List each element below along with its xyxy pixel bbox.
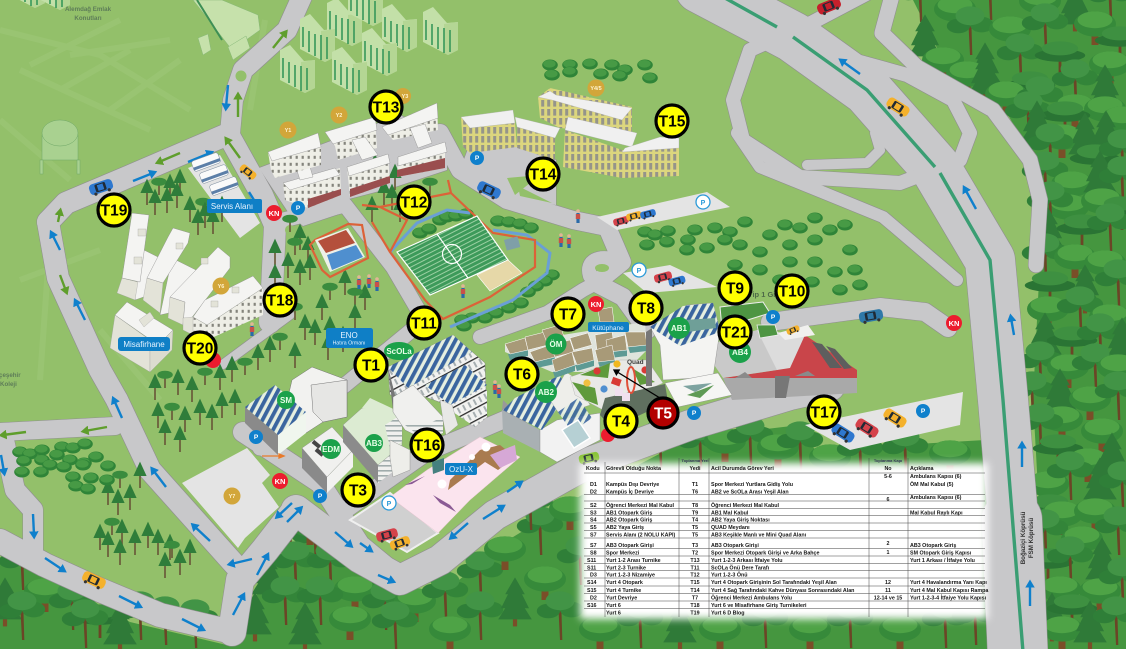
building circle: AB1: AB1 xyxy=(671,324,688,333)
building circle: SM xyxy=(277,391,295,409)
marker T11: T11 xyxy=(411,316,437,332)
faint paths in grass xyxy=(0,20,265,400)
marker T13 xyxy=(370,91,402,123)
dormitory Y4/5 yellow block xyxy=(461,88,679,178)
KN badges: KN xyxy=(275,477,285,486)
ScOLa building xyxy=(388,335,487,440)
assignment table: Yurt 6 D Blog xyxy=(711,610,745,616)
assignment table: ÖM Mal Kabul (5) xyxy=(910,481,954,488)
AB3 building xyxy=(343,398,410,483)
building circle: AB3 xyxy=(365,434,383,452)
building circles: student centre xyxy=(546,334,566,354)
assignment table: S8 xyxy=(590,550,597,556)
dormitory badges: Y4/5 xyxy=(590,86,602,92)
assignment table: Yurt 1-2-3 Nizamiye xyxy=(606,572,655,578)
assignment table: Spor Merkezi Otopark Girişi ve Arka Bahçe xyxy=(711,550,820,556)
assignment table: Yurt Devriye xyxy=(606,596,637,602)
assignment table: Kampüs Dışı Devriye xyxy=(606,482,659,488)
assignment table: T13 xyxy=(690,558,700,564)
marker T5 highlighted: T5 xyxy=(654,406,672,422)
marker T6: T6 xyxy=(513,366,531,384)
bushes: north and east clusters xyxy=(542,58,868,296)
AB2 building xyxy=(502,372,600,462)
marker T9: T9 xyxy=(726,280,744,298)
marker T12 xyxy=(398,186,430,218)
assignment table: Yurt 1-2-3 Önü xyxy=(711,572,748,578)
guest house building xyxy=(110,302,173,372)
assignment table: S4 xyxy=(590,518,597,524)
label: ENO Hatıra Ormanı: ENO xyxy=(340,331,358,340)
assignment table: Öğrenci Merkezi Mal Kabul xyxy=(606,502,675,509)
label: OzU-X: OzU-X xyxy=(449,465,474,474)
marker T18: T18 xyxy=(267,292,294,310)
dormitory badges xyxy=(212,80,604,504)
outlined parking badges: P xyxy=(637,268,642,275)
marker T15: T15 xyxy=(659,114,686,130)
building circle: EDM: EDM xyxy=(322,445,340,454)
cars xyxy=(80,0,911,591)
marker T4 xyxy=(605,405,637,437)
outlined parking badges: P xyxy=(701,200,706,207)
green roof terraces xyxy=(720,302,815,340)
assignment table: Öğrenci Merkezi Ambulans Yolu xyxy=(711,594,792,602)
assignment table: T5 xyxy=(692,525,698,531)
assignment table: Yurt 6 ve Misafirhane Giriş Turnikeleri xyxy=(711,603,807,609)
marker T4: T4 xyxy=(612,414,630,430)
assignment table: AB2 ve ScOLa Arası Yeşil Alan xyxy=(711,490,789,496)
assignment table: SM Otopark Giriş Kapısı xyxy=(910,550,972,556)
marker T11 xyxy=(408,307,440,339)
grass islands and loop detail xyxy=(236,70,609,272)
marker T1 xyxy=(355,349,387,381)
assignment table: T7 xyxy=(692,596,698,602)
building circle: AB3: AB3 xyxy=(366,439,383,448)
dormitory badges: Y3 xyxy=(402,94,408,100)
stream xyxy=(390,210,550,327)
light green housing blocks xyxy=(10,0,458,95)
assignment table: S11 xyxy=(587,558,596,564)
assignment table: Öğrenci Merkezi Mal Kabul xyxy=(711,502,780,509)
assignment table: ScOLa Önü Dere Tarafı xyxy=(711,564,770,572)
football field and beige pitch xyxy=(397,216,522,295)
arrow from T5 to quad xyxy=(614,370,660,398)
assignment table: S16 xyxy=(587,603,597,609)
assignment table: T14 xyxy=(690,588,700,594)
forest: bottom left xyxy=(0,560,235,649)
assignment table: No xyxy=(884,466,892,472)
marker T21 xyxy=(719,316,751,348)
marker T8 xyxy=(630,292,662,324)
marker T3: T3 xyxy=(349,482,367,500)
assignment table: AB2 Otopark Giriş xyxy=(606,518,652,524)
assignment table: Kodu xyxy=(586,466,600,472)
assignment table: T2 xyxy=(692,550,698,556)
marker T21: T21 xyxy=(722,324,749,342)
building circle: AB2 xyxy=(535,381,557,403)
assignment table: AB1 Otopark Giriş xyxy=(606,510,652,516)
assignment table: S3 xyxy=(590,510,597,516)
service buses xyxy=(191,152,239,196)
parking badges xyxy=(249,151,930,503)
dormitory badges: Y2 xyxy=(336,113,342,119)
forest trees: bottom xyxy=(0,416,998,649)
tennis and basketball court xyxy=(315,228,365,272)
assignment table: AB2 Yaya Giriş xyxy=(606,525,644,531)
sports centre building xyxy=(245,367,347,455)
label: Servis Alanı: Servis Alanı xyxy=(211,202,253,211)
assignment table: 12 xyxy=(885,580,891,586)
bridge labels: FSM Köprüsü xyxy=(1028,518,1035,558)
building circle: AB4 xyxy=(729,341,751,363)
marker T13: T13 xyxy=(373,100,400,116)
Çeşehir Koleji label: Koleji xyxy=(0,381,17,388)
assignment table: 2 xyxy=(887,541,890,547)
label: Misafirhane xyxy=(118,337,170,351)
Alemdağ Emlak Konutları label: Alemdağ Emlak xyxy=(65,6,111,13)
marker T16: T16 xyxy=(414,438,441,454)
bridge labels xyxy=(1020,511,1035,564)
marker T17: T17 xyxy=(811,404,837,422)
building circle: ScOLa xyxy=(384,342,414,360)
assignment table: Acil Durumda Görev Yeri xyxy=(711,466,774,472)
outlined parking badges xyxy=(382,195,710,510)
dormitory Y6 blocks xyxy=(117,213,263,340)
assignment table: T18 xyxy=(690,603,700,609)
label: ENO Hatıra Ormanı: Hatıra Ormanı xyxy=(333,340,365,346)
table white backing xyxy=(580,463,988,619)
building circle: AB4: AB4 xyxy=(732,348,749,357)
marker T19: T19 xyxy=(101,202,128,220)
assignment table: Yurt 1 Arkası / İtfaiye Yolu xyxy=(910,557,975,564)
AB1 building xyxy=(646,303,720,386)
label: OzU-X xyxy=(445,463,477,475)
bridge labels: Boğaziçi Köprüsü xyxy=(1020,511,1027,564)
assignment table: Servis Alanı (2 NOLU KAPI) xyxy=(606,532,676,538)
assignment table: Yurt 4 Havalandırma Yanı Kapı xyxy=(910,580,987,586)
marker T20 xyxy=(184,332,216,364)
dormitories Y1 Y2 Y3 xyxy=(268,103,447,208)
bushes: south-west cluster xyxy=(12,438,116,495)
people figures xyxy=(250,209,580,398)
dormitory badges: Y6 xyxy=(218,284,224,290)
assignment table: 6 xyxy=(887,497,890,503)
dormitory badges: Y7 xyxy=(229,494,235,500)
assignment table: D2 xyxy=(590,596,597,602)
marker T14: T14 xyxy=(530,166,557,184)
forest: right side xyxy=(913,0,1126,649)
assignment table: T5 xyxy=(692,532,698,538)
assignment table: Toplanma Yeri xyxy=(682,458,708,463)
marker T8: T8 xyxy=(637,300,655,318)
assignment table: Yurt 4 Mal Kabul Kapısı Rampa xyxy=(910,588,988,594)
assignment table: T11 xyxy=(691,566,699,572)
assignment table: Mal Kabul Raylı Kapı xyxy=(910,510,963,516)
Alemdağ building xyxy=(193,0,260,60)
student centre row houses xyxy=(505,307,647,378)
assignment table: Spor Merkezi xyxy=(606,550,640,556)
assignment table xyxy=(584,458,988,617)
assignment table: T8 xyxy=(692,503,698,509)
marker T10: T10 xyxy=(779,284,805,300)
assignment table: T6 xyxy=(692,490,698,496)
building circle: ScOLa: ScOLa xyxy=(386,347,412,356)
building circle: AB1 xyxy=(668,317,690,339)
label: Misafirhane: Misafirhane xyxy=(123,340,165,349)
assignment table: 1 xyxy=(887,550,890,556)
assignment table: QUAD Meydanı xyxy=(711,525,750,531)
assignment table: T4 xyxy=(692,518,698,524)
assignment table: 5-6 xyxy=(884,474,892,480)
assignment table: S5 xyxy=(590,525,597,531)
parking badges: P xyxy=(692,410,697,417)
dormitory badges: Y1 xyxy=(285,128,291,134)
assignment table: S2 xyxy=(590,503,597,509)
Quad label: Quad xyxy=(627,359,644,366)
mosque xyxy=(40,120,80,174)
EDM building xyxy=(302,427,353,493)
assignment table: AB3 Otopark Girişi xyxy=(711,543,759,549)
assignment table: Yurt 4 Otopark xyxy=(606,580,643,586)
parking badges: P xyxy=(318,493,323,500)
marker T7 xyxy=(552,298,584,330)
marker T14 xyxy=(527,158,559,190)
assignment table: D2 xyxy=(590,490,597,496)
parking badges: P xyxy=(254,434,259,441)
assignment table: S15 xyxy=(587,588,597,594)
assignment table: Ambulans Kapısı (6) xyxy=(910,495,962,501)
assignment table: AB3 Keşikle Manlı ve Mini Quad Alanı xyxy=(711,532,807,538)
label: Servis Alanı xyxy=(207,199,262,213)
assignment table: Spor Merkezi Yurtlara Gidiş Yolu xyxy=(711,482,793,488)
parking lot at OzU-X xyxy=(350,493,438,552)
bushes: along stream xyxy=(412,208,560,332)
label: Kütüphane xyxy=(588,322,629,332)
forest: bottom centre xyxy=(228,425,1000,649)
assignment table: Yedi xyxy=(690,466,701,472)
assignment table: T9 xyxy=(692,510,698,516)
parking badges: P xyxy=(296,205,301,212)
assignment table: Yurt 1-2-3-4 İtfaiye Yolu Kapısı xyxy=(910,594,987,602)
assignment table: S14 xyxy=(587,580,597,586)
marker T5 highlighted xyxy=(648,398,678,428)
assignment table: T1 xyxy=(692,482,698,488)
assignment table: Kampüs İç Devriye xyxy=(606,488,654,496)
marker T12: T12 xyxy=(401,194,427,212)
KN badges: KN xyxy=(949,319,959,328)
building circle: SM: SM xyxy=(280,396,292,405)
marker T20: T20 xyxy=(187,340,213,358)
building circle: EDM xyxy=(321,439,341,459)
label: ENO Hatıra Ormanı xyxy=(326,328,373,348)
quad square xyxy=(570,360,668,428)
assignment table: AB3 Otopark Giriş xyxy=(910,543,956,549)
assignment table: Görevli Olduğu Nokta xyxy=(606,466,661,472)
assignment table: S11 xyxy=(587,566,596,572)
KN badges: KN xyxy=(269,209,279,218)
assignment table: Yurt 4 Sağ Tarafındaki Kahve Dünyası Sonrasındaki Alan xyxy=(711,588,854,594)
KN badges xyxy=(205,205,962,489)
marker T19 xyxy=(98,194,130,226)
assignment table: D1 xyxy=(590,482,597,488)
parking badges: P xyxy=(771,314,776,321)
OzU-X building xyxy=(390,437,520,533)
assignment table: Yurt 4 Otopark Girişinin Sol Tarafındaki Yeşil Alan xyxy=(711,580,837,586)
assignment table: Yurt 2-3 Turnike xyxy=(606,566,646,572)
forest trees: right xyxy=(897,0,1126,649)
assignment table: Yurt 6 xyxy=(606,603,621,609)
assignment table: S7 xyxy=(590,543,597,549)
marker T1: T1 xyxy=(362,358,380,374)
assignment table: AB3 Otopark Girişi xyxy=(606,543,654,549)
marker T10 xyxy=(776,275,808,307)
marker T9 xyxy=(719,272,751,304)
Tip 1 Giriş label: Tip 1 Giriş xyxy=(748,290,785,299)
label: Kütüphane: Kütüphane xyxy=(592,325,624,332)
highway centre line xyxy=(725,0,1023,649)
parking badges: P xyxy=(475,155,480,162)
marker T15 xyxy=(656,105,688,137)
assignment table: AB2 Yaya Giriş Noktası xyxy=(711,518,770,524)
assignment table: 12-14 ve 15 xyxy=(874,596,902,602)
assignment table: Yurt 6 xyxy=(606,610,621,616)
wedge roof at AB1 xyxy=(665,373,732,407)
building circles: student centre: ÖM xyxy=(550,340,563,349)
Alemdağ Emlak Konutları label: Konutları xyxy=(74,15,102,22)
small trees: north-west grove xyxy=(93,151,438,578)
assignment table: T12 xyxy=(690,572,700,578)
assignment table: Ambulans Kapısı (6) xyxy=(910,474,962,480)
marker T16 xyxy=(411,429,443,461)
orange campus boundary xyxy=(310,180,535,319)
assignment table: Açıklama xyxy=(910,466,933,472)
KN badges: KN xyxy=(591,300,601,309)
building circle: AB2: AB2 xyxy=(538,388,555,397)
assignment table: 11 xyxy=(885,588,891,594)
marker T18 xyxy=(264,284,296,316)
assignment table: T3 xyxy=(692,543,698,549)
marker T17 xyxy=(808,396,840,428)
parking badges: P xyxy=(921,408,926,415)
assignment table: Yurt 4 Turnike xyxy=(606,588,641,594)
AB4 red roof hall xyxy=(702,330,857,400)
assignment table: AB1 Mal Kabul xyxy=(711,510,749,516)
assignment table: Yurt 1-2 Arası Turnike xyxy=(606,558,661,564)
orange direction arrow xyxy=(262,454,284,458)
assignment table: Yurt 1-2-3 Arkası İtfaiye Yolu xyxy=(711,557,782,564)
assignment table: D3 xyxy=(590,572,597,578)
assignment table: T19 xyxy=(690,610,700,616)
assignment table: T15 xyxy=(690,580,700,586)
marker T6 xyxy=(506,358,538,390)
marker T7: T7 xyxy=(559,306,577,324)
outlined parking badges: P xyxy=(387,501,392,508)
light parking and service surfaces xyxy=(182,155,963,548)
marker T3 xyxy=(342,474,374,506)
assignment table: Toplanma Kapı xyxy=(874,458,902,463)
assignment table: S7 xyxy=(590,532,597,538)
